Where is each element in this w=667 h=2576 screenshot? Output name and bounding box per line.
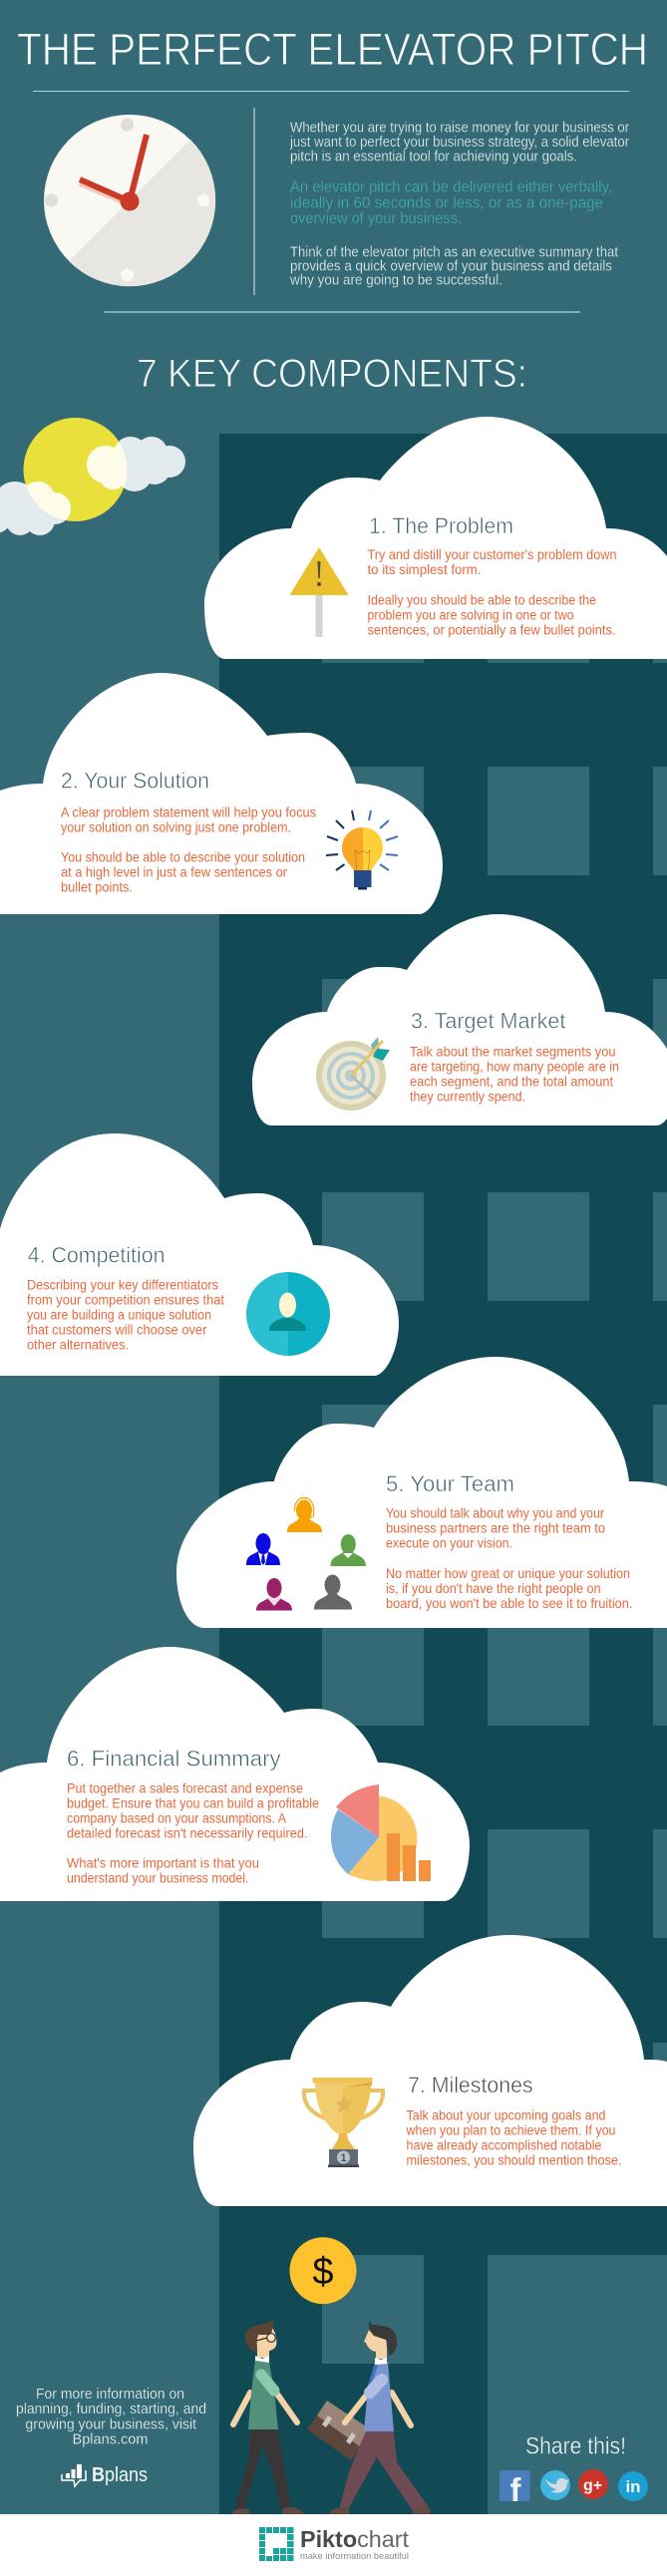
illustration: man with glasses bbox=[232, 2320, 304, 2514]
text: competition: Describing your key differentiators bbox=[27, 1276, 218, 1292]
text: your team bbox=[386, 1505, 632, 1611]
icon: facebook bbox=[500, 2470, 530, 2508]
text: competition: from your competition ensures that bbox=[27, 1291, 224, 1307]
text: milestones: Talk about your upcoming goals and bbox=[407, 2107, 606, 2123]
text: competition: you are building a unique solution bbox=[27, 1306, 211, 1322]
heading: your solution: 2. Your Solution bbox=[61, 769, 209, 794]
icon: linkedin bbox=[618, 2471, 648, 2501]
text: financial summary bbox=[67, 1779, 319, 1886]
icon: sun with clouds bbox=[0, 418, 185, 535]
panel: 5 your team bbox=[176, 1357, 667, 1628]
icon: Piktochart mark bbox=[259, 2527, 293, 2561]
text: your team: board, you won't be able to see it to fruition. bbox=[386, 1595, 632, 1611]
text: milestones bbox=[406, 2107, 622, 2168]
text: your solution: at a high level in just a few sentences or bbox=[61, 863, 287, 879]
icon: trophy bbox=[304, 2078, 383, 2167]
icon: dollar coin: $ bbox=[312, 2251, 334, 2293]
logo: Piktochart bbox=[259, 2526, 410, 2562]
text: the problem: Try and distill your customer's problem down bbox=[367, 546, 616, 562]
icons: social media bbox=[500, 2469, 648, 2508]
text: more information: Bplans.com bbox=[72, 2431, 148, 2448]
text: target market: Talk about the market segments you bbox=[410, 1043, 616, 1059]
panel: 3 target market bbox=[252, 914, 667, 1126]
panel: 4 competition bbox=[0, 1133, 399, 1376]
icon: dollar coin bbox=[289, 2237, 357, 2304]
text: more information: growing your business, visit bbox=[26, 2416, 197, 2433]
intro text: An elevator pitch can be delivered either verbally, bbox=[290, 179, 612, 196]
icon: light bulb bbox=[326, 810, 398, 889]
heading: milestones: 7. Milestones bbox=[408, 2073, 533, 2097]
intro text: ideally in 60 seconds or less, or as a one-page bbox=[290, 194, 603, 211]
text: your solution: bullet points. bbox=[61, 879, 133, 895]
text: competition bbox=[27, 1276, 224, 1352]
illustration: briefcase bbox=[307, 2401, 372, 2460]
intro text: why you are going to be successful. bbox=[289, 273, 502, 289]
text: financial summary: detailed forecast isn't necessarily required. bbox=[67, 1824, 307, 1840]
heading: the problem: 1. The Problem bbox=[369, 513, 513, 538]
text: target market: they currently spend. bbox=[410, 1088, 525, 1104]
icon: twitter bbox=[540, 2470, 570, 2500]
person: orange with headset bbox=[287, 1497, 322, 1532]
intro text: Think of the elevator pitch as an executive summary that bbox=[290, 244, 618, 260]
text: competition: other alternatives. bbox=[27, 1336, 129, 1352]
heading: financial summary: 6. Financial Summary bbox=[67, 1747, 281, 1771]
intro text: Whether you are trying to raise money for your business or bbox=[290, 121, 629, 137]
intro text: pitch is an essential tool for achieving your goals. bbox=[290, 149, 577, 164]
text: financial summary: budget. Ensure that you can build a profitable bbox=[67, 1794, 319, 1810]
icon: target with arrow bbox=[316, 1037, 390, 1111]
icon: linkedin: in bbox=[625, 2477, 641, 2496]
heading: your team: 5. Your Team bbox=[386, 1471, 514, 1496]
logo: Piktochart: make information beautiful bbox=[300, 2551, 409, 2562]
text: financial summary: understand your business model. bbox=[67, 1870, 249, 1886]
text: milestones: milestones, you should mention those. bbox=[407, 2152, 622, 2168]
icon: pie and bar chart bbox=[331, 1784, 431, 1881]
heading: target market: 3. Target Market bbox=[411, 1009, 565, 1034]
heading: 7 key components: 7 KEY COMPONENTS: bbox=[137, 352, 527, 396]
footer band bbox=[0, 2514, 667, 2576]
text: target market bbox=[410, 1043, 619, 1104]
text: competition: that customers will choose over bbox=[27, 1321, 207, 1337]
logo: Bplans bbox=[62, 2464, 148, 2486]
text: your solution: You should be able to describe your solution bbox=[61, 848, 305, 864]
panel: 7 milestones bbox=[193, 1935, 667, 2206]
logo: Bplans: Bplans bbox=[92, 2464, 148, 2486]
text: financial summary: Put together a sales forecast and expense bbox=[67, 1779, 303, 1795]
text: your team: business partners are the right team to bbox=[386, 1520, 605, 1536]
text: the problem bbox=[367, 546, 616, 638]
text: the problem: Ideally you should be able to describe the bbox=[367, 592, 596, 608]
person: blue in suit bbox=[246, 1533, 280, 1565]
text: more information: planning, funding, starting, and bbox=[16, 2401, 206, 2417]
icon: person in circle bbox=[246, 1272, 330, 1356]
text: financial summary: company based on your assumptions. A bbox=[67, 1809, 287, 1825]
text: target market: are targeting, how many people are in bbox=[410, 1058, 619, 1074]
icon: warning sign bbox=[290, 547, 348, 637]
person: gray bbox=[314, 1575, 352, 1609]
panel: 1 the problem bbox=[204, 417, 667, 659]
icon: google plus: g+ bbox=[583, 2477, 602, 2494]
text: your team: execute on your vision. bbox=[386, 1535, 512, 1551]
icon: facebook: f bbox=[510, 2471, 522, 2508]
text: your team: No matter how great or unique your solution bbox=[386, 1565, 630, 1581]
panel: 2 your solution bbox=[0, 673, 443, 914]
icon: team of five people bbox=[246, 1497, 366, 1611]
text: more information: For more information on bbox=[36, 2386, 184, 2403]
intro text: provides a quick overview of your business and details bbox=[290, 258, 612, 274]
icon: google plus bbox=[578, 2469, 608, 2499]
person: green bbox=[331, 1534, 366, 1566]
text: your solution bbox=[61, 804, 316, 895]
icon: clock bbox=[44, 115, 215, 286]
text: the problem: sentences, or potentially a few bullet points. bbox=[367, 622, 616, 638]
text: your team: You should talk about why you and your bbox=[386, 1505, 604, 1521]
text: your team: is, if you don't have the right people on bbox=[386, 1580, 600, 1596]
logo: Piktochart: Piktochart bbox=[300, 2526, 410, 2552]
person: purple bbox=[256, 1578, 292, 1611]
building background bbox=[219, 434, 667, 2514]
heading: competition: 4. Competition bbox=[28, 1243, 166, 1268]
panel: 6 financial summary bbox=[0, 1647, 470, 1901]
intro text: overview of your business. bbox=[290, 210, 462, 227]
heading: share this: Share this! bbox=[525, 2433, 626, 2460]
text: financial summary: What's more important is that you bbox=[67, 1855, 259, 1871]
text: milestones: have already accomplished notable bbox=[407, 2137, 602, 2153]
text: target market: each segment, and the total amount bbox=[410, 1073, 613, 1089]
text: milestones: when you plan to achieve them. If you bbox=[406, 2122, 616, 2138]
text: your solution: your solution on solving just one problem. bbox=[61, 818, 291, 834]
text: the problem: problem you are solving in one or two bbox=[367, 607, 574, 623]
icon: trophy: 1 bbox=[340, 2152, 347, 2164]
text: your solution: A clear problem statement will help you focus bbox=[61, 804, 316, 819]
intro text: just want to perfect your business strategy, a solid elevator bbox=[289, 135, 629, 151]
text: the problem: to its simplest form. bbox=[367, 561, 481, 577]
intro text bbox=[289, 121, 629, 289]
text: more information bbox=[16, 2386, 206, 2448]
illustration: man with blue shirt bbox=[329, 2321, 431, 2514]
